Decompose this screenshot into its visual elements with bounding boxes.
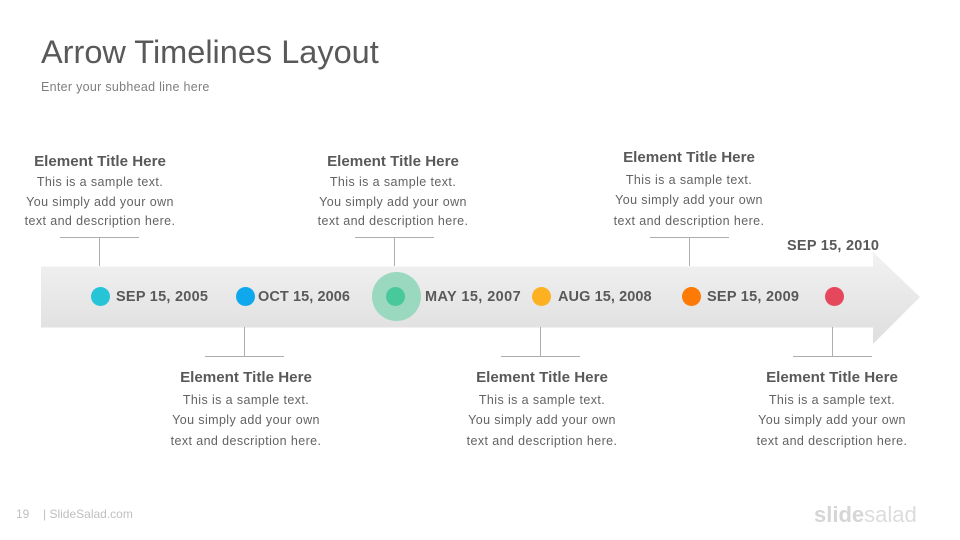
text block: element 6: This is a sample text. bbox=[769, 393, 895, 407]
date: may 2007: MAY 15, 2007 bbox=[425, 289, 521, 305]
text block: element 2: This is a sample text. bbox=[183, 393, 309, 407]
marker: may 2007 bbox=[386, 287, 405, 306]
text block: element 1: Element Title Here bbox=[34, 153, 166, 170]
text block: element 2 bbox=[170, 369, 321, 448]
connector: element 1 bbox=[60, 237, 139, 266]
text block: element 4: Element Title Here bbox=[476, 369, 608, 386]
text block: element 5: Element Title Here bbox=[623, 149, 755, 166]
marker: aug 2008 bbox=[532, 287, 551, 306]
text block: element 1 bbox=[24, 153, 175, 228]
text block: element 6: You simply add your own bbox=[758, 413, 906, 427]
text block: element 4: text and description here. bbox=[467, 434, 617, 448]
text block: element 5: text and description here. bbox=[614, 214, 764, 228]
marker: sep 2010 bbox=[825, 287, 844, 306]
marker halo: may 2007 bbox=[372, 272, 421, 321]
text block: element 3 bbox=[318, 153, 468, 228]
text block: element 4: This is a sample text. bbox=[479, 393, 605, 407]
connector: element 3 bbox=[355, 237, 434, 266]
logo wordmark: slidesalad bbox=[814, 502, 917, 527]
date: oct 2006: OCT 15, 2006 bbox=[258, 289, 350, 305]
text block: element 2: Element Title Here bbox=[180, 369, 312, 386]
text block: element 6 bbox=[756, 369, 907, 448]
date: sep 2005: SEP 15, 2005 bbox=[116, 289, 208, 305]
text block: element 2: You simply add your own bbox=[172, 413, 320, 427]
marker: sep 2005 bbox=[91, 287, 110, 306]
date: aug 2008: AUG 15, 2008 bbox=[558, 289, 652, 305]
footer site name: | SlideSalad.com bbox=[43, 507, 133, 521]
title: Arrow Timelines Layout bbox=[41, 34, 379, 70]
text block: element 5: You simply add your own bbox=[615, 193, 763, 207]
connector: element 5 bbox=[650, 237, 729, 266]
marker: oct 2006 bbox=[236, 287, 255, 306]
text block: element 3: text and description here. bbox=[318, 214, 468, 228]
subhead: Enter your subhead line here bbox=[41, 80, 210, 94]
connector: element 6 bbox=[793, 327, 872, 357]
text block: element 6: Element Title Here bbox=[766, 369, 898, 386]
text block: element 6: text and description here. bbox=[757, 434, 907, 448]
text block: element 1: text and description here. bbox=[25, 214, 175, 228]
connector: element 2 bbox=[205, 327, 284, 357]
date: sep 2010: SEP 15, 2010 bbox=[787, 238, 879, 254]
text block: element 5 bbox=[614, 149, 764, 228]
connector: element 4 bbox=[501, 327, 580, 357]
text block: element 3: You simply add your own bbox=[319, 195, 467, 209]
text block: element 3: This is a sample text. bbox=[330, 175, 456, 189]
date: sep 2009: SEP 15, 2009 bbox=[707, 289, 799, 305]
text block: element 1: You simply add your own bbox=[26, 195, 174, 209]
marker: sep 2009 bbox=[682, 287, 701, 306]
text block: element 1: This is a sample text. bbox=[37, 175, 163, 189]
text block: element 4 bbox=[466, 369, 617, 448]
text block: element 5: This is a sample text. bbox=[626, 173, 752, 187]
text block: element 4: You simply add your own bbox=[468, 413, 616, 427]
text block: element 2: text and description here. bbox=[171, 434, 321, 448]
page number: 19 bbox=[16, 507, 29, 521]
text block: element 3: Element Title Here bbox=[327, 153, 459, 170]
